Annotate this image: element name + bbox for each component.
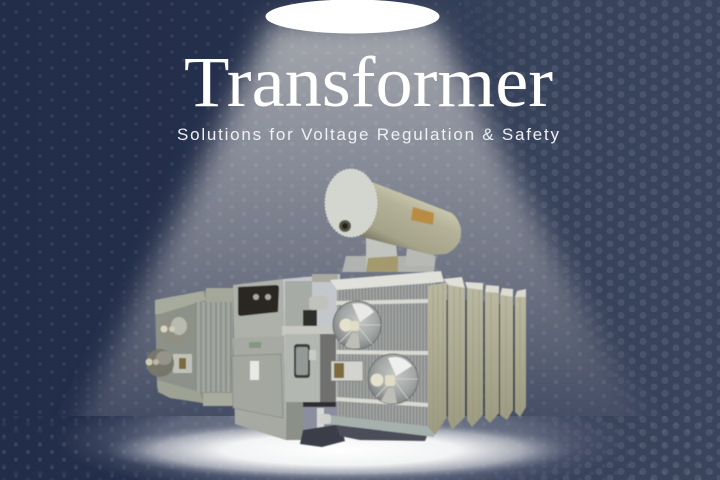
central cabinet	[232, 279, 286, 440]
title: Transformer	[184, 42, 553, 122]
conservator tank	[325, 169, 461, 255]
radiator fins	[428, 277, 526, 435]
mid section with piping	[283, 274, 345, 447]
spotlight lamp ellipse	[266, 0, 440, 34]
bottom pipe	[319, 414, 434, 441]
fan upper	[333, 301, 381, 349]
control box	[282, 326, 337, 402]
main radiator ribs	[336, 282, 435, 427]
left fans	[146, 315, 190, 377]
fan lower	[368, 354, 418, 404]
small control panel on radiator	[331, 361, 363, 381]
lit floor	[2, 416, 630, 480]
top cover	[330, 271, 444, 290]
conservator support	[342, 232, 436, 272]
spotlight beam	[72, 4, 642, 416]
left radiator unit	[155, 288, 233, 406]
transformer illustration	[146, 169, 526, 447]
subtitle: Solutions for Voltage Regulation & Safety	[177, 125, 560, 144]
